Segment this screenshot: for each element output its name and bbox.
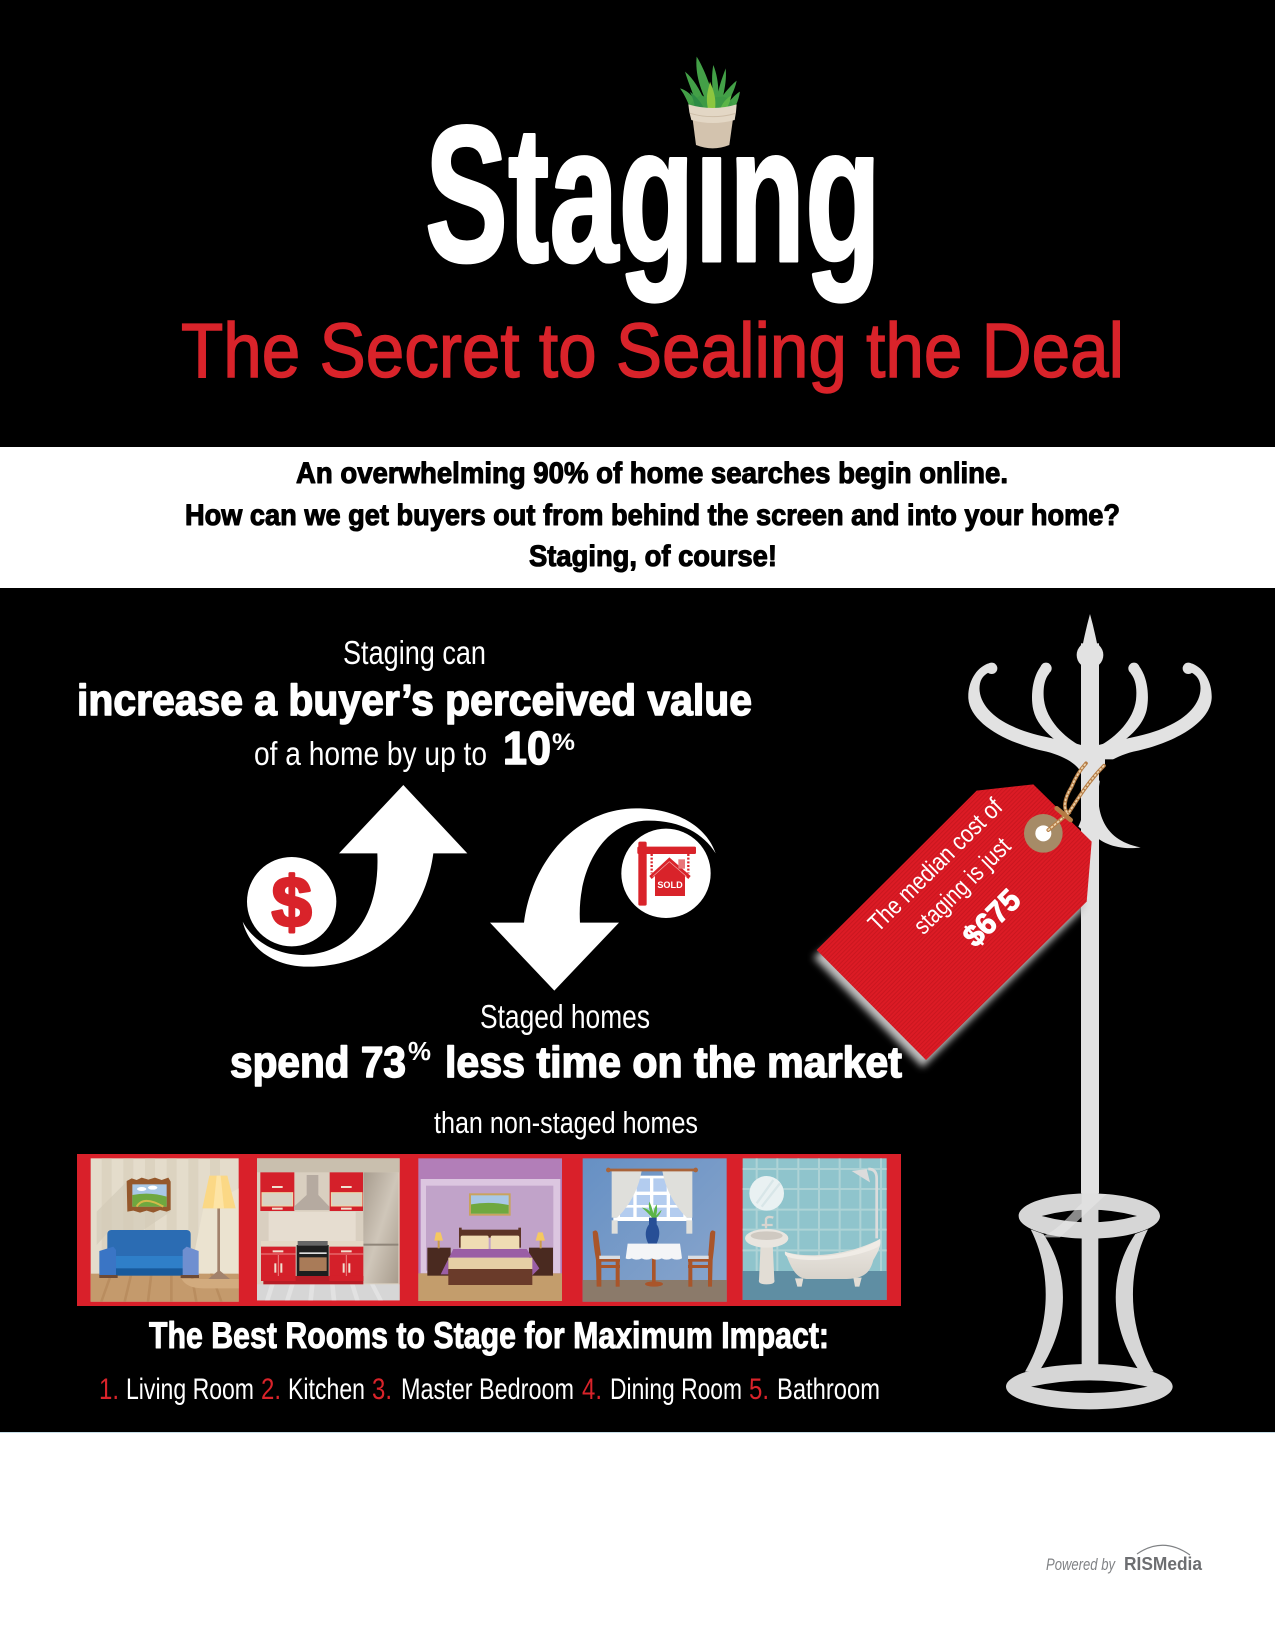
stat number 10%: % [552,729,575,756]
room: kitchen [257,1158,400,1300]
stat lead-in: Staged homes [480,998,650,1035]
best rooms list: 5. [749,1373,769,1406]
intro line 3: Staging, of course! [529,540,777,573]
coat rack [968,614,1212,1409]
tag string [1048,763,1104,830]
best rooms list: 2. [261,1373,281,1406]
best rooms list: 4. [582,1373,602,1406]
icon: down arrow with sold sign [490,808,716,991]
header panel [0,0,1275,447]
up arrow [243,785,467,967]
subtitle: The Secret to Sealing the Deal [181,308,1124,394]
stat headline: spend 73 [230,1038,406,1087]
rack stand [1006,1150,1173,1409]
room: living room [91,1158,239,1302]
stat trailing text: than non-staged homes [434,1105,698,1140]
logo arc [1137,1545,1190,1555]
tag body [817,784,1092,1060]
stat: perceived value [77,634,752,774]
stat headline [230,1036,902,1087]
best rooms list: Master Bedroom [401,1373,574,1406]
strip background [77,1154,901,1306]
best rooms list: 1. [99,1373,119,1406]
powered by: Powered by [1046,1555,1116,1574]
icon: potted plant [680,57,740,148]
room: bathroom [743,1158,887,1300]
tag eyelet [1024,814,1063,853]
best rooms list: Kitchen [288,1373,365,1406]
intro line 2: How can we get buyers out from behind the screen and into your home? [185,499,1120,532]
best rooms heading: The Best Rooms to Stage for Maximum Impact: [149,1315,829,1356]
sold sign [637,842,696,906]
room: master bedroom [418,1158,562,1301]
price tag [813,763,1104,1067]
room: dining room [583,1158,727,1302]
tag text: staging is just [909,833,1016,940]
main black panel [0,588,1275,1432]
stat number 10%: 10 [503,722,551,774]
stat: time on market [230,998,902,1140]
intro line 1: An overwhelming 90% of home searches begin online. [296,457,1008,490]
tag shadow [813,833,1083,1067]
best rooms list: Dining Room [610,1373,742,1406]
tag text: $675 [956,883,1027,954]
rack pole and hooks [968,614,1212,1193]
down arrow [490,808,716,991]
room strip [77,1154,901,1306]
stat headline: less time on the market [445,1038,902,1087]
dollar circle [247,857,336,946]
icon: up arrow with dollar [243,785,467,967]
panel bottom line [0,1432,1275,1433]
stat lead-in: Staging can [343,634,486,671]
stat headline: increase a buyer’s perceived value [77,676,752,725]
title: Staging: Staging [425,86,881,303]
best rooms list: Bathroom [777,1373,880,1406]
stat trailing text: of a home by up to [254,735,487,772]
stat headline: % [408,1036,431,1066]
best rooms list: 3. [372,1373,392,1406]
tag text: The median cost of [863,793,1008,937]
dollar sign: $ [272,863,312,943]
sold circle [621,829,711,918]
best rooms list [99,1373,880,1406]
RISMedia wordmark: RISMedia [1124,1554,1203,1574]
footer logo [1046,1545,1203,1574]
best rooms list: Living Room [126,1373,254,1406]
sold sign: SOLD [657,880,683,890]
intro text band [0,447,1275,588]
